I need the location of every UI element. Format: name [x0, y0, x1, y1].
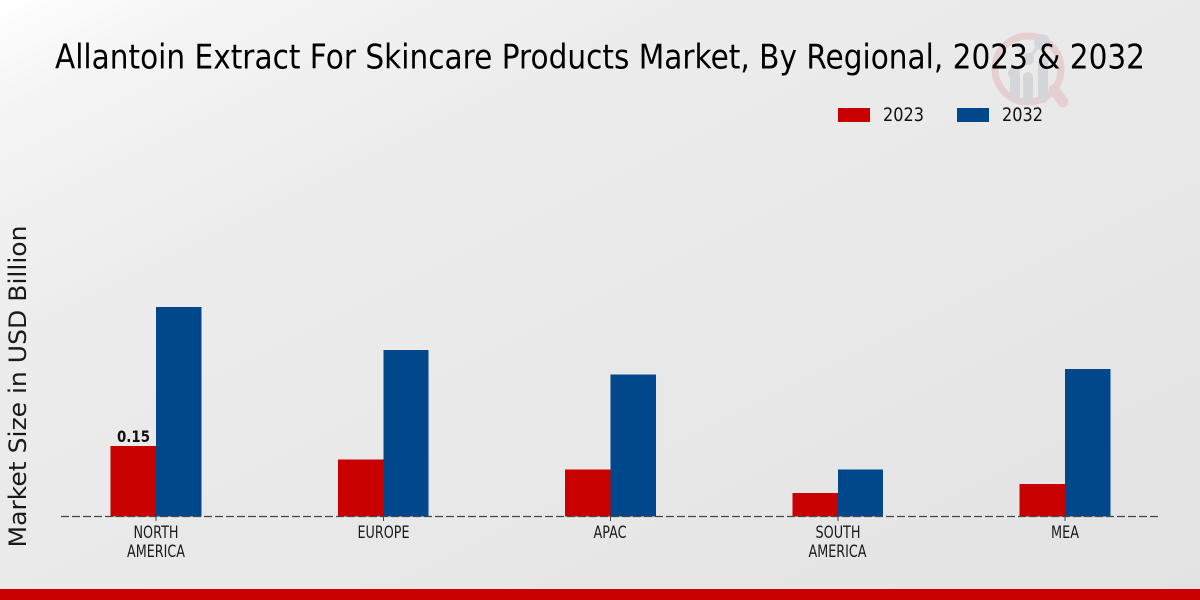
data label: 0.15: 0.15: [117, 427, 150, 446]
bars: MEA: [1020, 369, 1110, 516]
label: North America: NORTH: [134, 523, 178, 542]
tick marks: [156, 516, 1065, 521]
bars: North America: [110, 307, 202, 516]
label: APAC: APAC: [594, 523, 626, 542]
baseline: [61, 516, 1160, 518]
label: Europe: EUROPE: [358, 523, 410, 542]
bars: Europe: [338, 350, 428, 516]
legend item: 2032: 2032: [1002, 104, 1043, 126]
legend item: 2032: [957, 104, 1043, 126]
label: South America: SOUTH: [816, 523, 860, 542]
label: MEA: MEA: [1051, 523, 1080, 542]
bar chart: [61, 307, 1160, 521]
legend item: 2023: 2023: [883, 104, 924, 126]
legend: [838, 104, 1043, 126]
x axis labels: [127, 523, 1080, 561]
bars: South America: [792, 470, 883, 516]
icon: watermark logo: [995, 34, 1063, 105]
bars: APAC: [565, 374, 656, 516]
footer bar: [0, 589, 1200, 600]
x axis labels: AMERICA: [127, 542, 186, 561]
y axis title: Market Size in USD Billion: [4, 226, 32, 548]
x axis labels: AMERICA: [808, 542, 867, 561]
legend item: 2023: [838, 104, 924, 126]
